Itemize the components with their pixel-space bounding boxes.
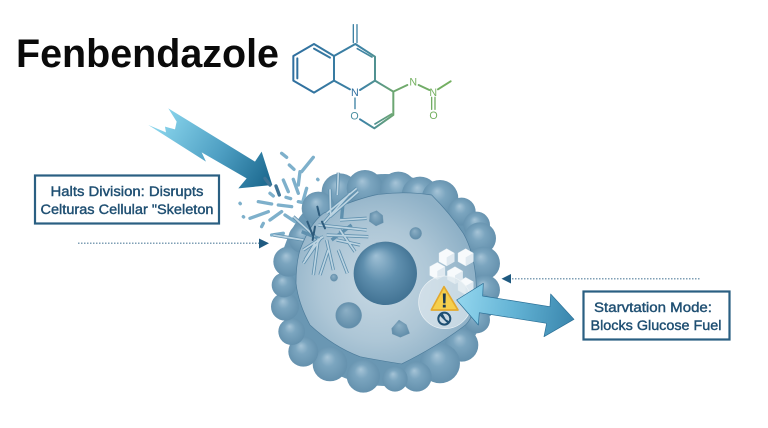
molecule structure: N [351,87,359,99]
cytoplasm [296,193,477,364]
clock blocked icon [438,313,450,325]
callout: starvation mode [584,292,730,340]
molecule structure: O [429,110,438,122]
callout: halts division [35,176,219,224]
microtubule fragments [240,153,318,235]
cell [271,170,500,393]
callout: starvation mode: Starvtation Mode: [594,300,712,315]
arrow: drug into cytoskeleton [148,108,272,188]
dotted arrow: left [78,238,269,248]
warning triangle: ! [441,289,448,312]
glucose cubes [430,249,473,295]
callout: starvation mode: Blocks Glucose Fuel [590,318,722,333]
nucleus [354,242,417,305]
molecule structure: O [350,110,359,122]
molecule structure: N [429,87,437,99]
dotted arrow: right [502,274,701,284]
molecule structure [293,25,451,128]
molecule structure: N [409,76,417,88]
title: Fenbendazole [16,32,279,76]
microtubules [273,173,368,275]
cell outer lobes [271,170,500,393]
double arrow: glucose block [457,283,574,337]
organelles [330,211,422,337]
callout: halts division: Celturas Cellular "Skeleton [40,202,214,217]
callout: halts division: Halts Division: Disrupts [50,184,204,199]
warning lens [419,276,471,329]
